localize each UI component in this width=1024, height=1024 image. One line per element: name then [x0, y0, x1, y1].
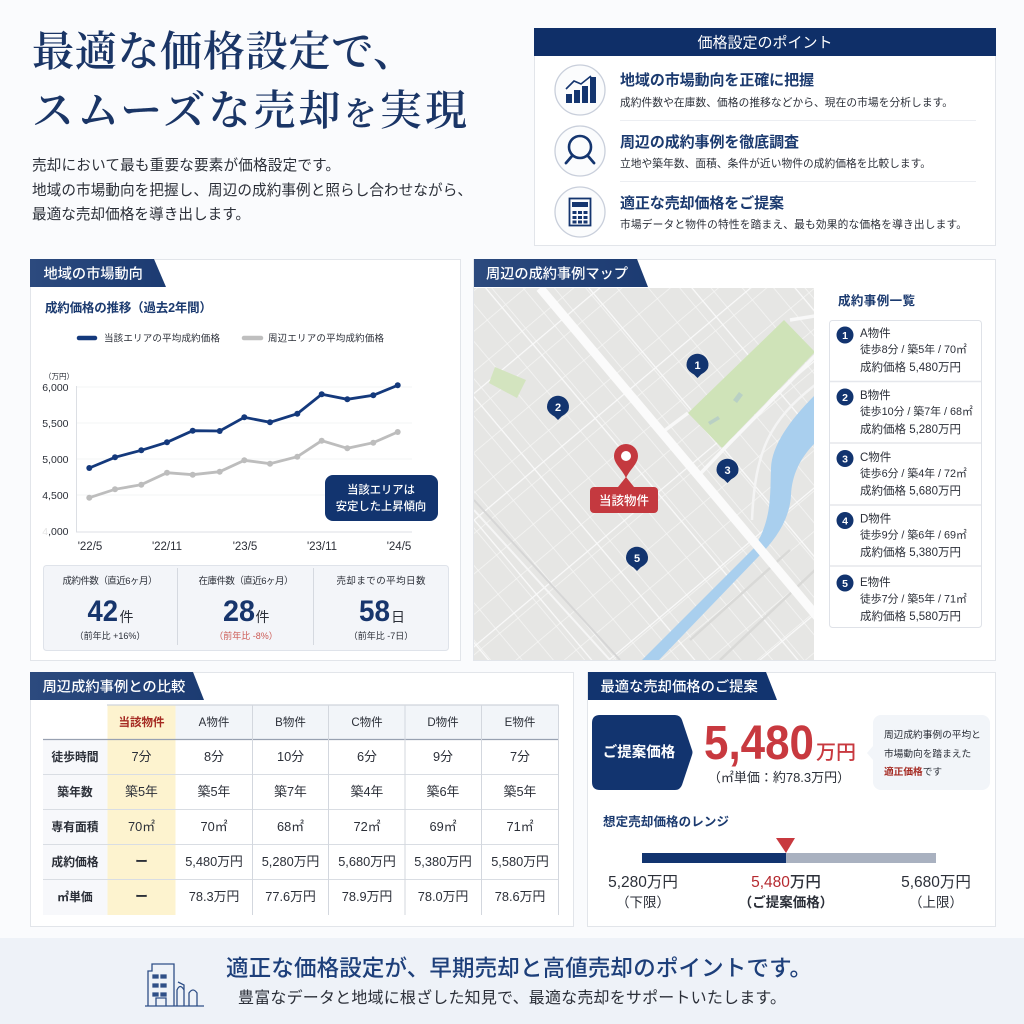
intro text: 地域の市場動向を把握し、周辺の成約事例と照らし合わせながら、 — [32, 182, 472, 199]
case B: B物件 — [860, 388, 891, 402]
panel: nearby cases map — [474, 259, 996, 660]
stat: closed deals — [62, 575, 158, 641]
row: floor area: 70㎡ — [200, 819, 228, 834]
row: building age: 築5年 — [198, 784, 231, 799]
case D — [836, 512, 967, 559]
row: walking time — [51, 749, 530, 764]
row: unit price: 78.9万円 — [342, 889, 392, 904]
series: target area — [86, 382, 401, 471]
pin: case 5 — [626, 547, 648, 571]
case C: 3 — [842, 454, 848, 466]
y axis labels: 5,500 — [42, 418, 69, 430]
title — [32, 29, 467, 135]
table header: B物件 — [275, 715, 306, 729]
point 2: nearby cases: 立地や築年数、面積、条件が近い物件の成約価格を比較します。 — [620, 157, 931, 170]
row: walking time: 8分 — [204, 749, 224, 764]
case C: 徒歩6分 / 築4年 / 72㎡ — [860, 466, 967, 480]
heading: proposal — [588, 672, 777, 700]
row: walking time: 10分 — [277, 749, 304, 764]
case B — [836, 388, 973, 436]
range bar — [642, 838, 936, 863]
stat: inventory: 件 — [256, 609, 270, 625]
y axis labels: 5,000 — [42, 454, 69, 466]
panel: market trends — [30, 259, 460, 660]
stat: days to sale: （前年比 -7日） — [349, 630, 413, 641]
chart legend: 周辺エリアの平均成約価格 — [268, 332, 384, 344]
note: appropriate price — [867, 715, 990, 790]
row: floor area — [51, 819, 534, 834]
y axis labels: 4,500 — [42, 490, 69, 502]
case B: 徒歩10分 / 築7年 / 68㎡ — [860, 404, 973, 418]
row: unit price — [57, 889, 545, 904]
intro text — [32, 157, 472, 223]
case D: 徒歩9分 / 築6年 / 69㎡ — [860, 528, 967, 542]
chart legend — [79, 332, 384, 344]
row: walking time: 7分 — [132, 749, 152, 764]
pin: case 1 — [686, 354, 708, 378]
line chart — [42, 372, 438, 553]
y axis labels: 6,000 — [42, 382, 69, 394]
case A: 成約価格 5,480万円 — [860, 360, 961, 374]
case E: 5 — [842, 578, 848, 590]
chart title: 成約価格の推移（過去2年間） — [45, 300, 212, 315]
stat: inventory: 在庫件数（直近6ヶ月） — [198, 575, 294, 587]
point 1: market trend — [555, 65, 953, 115]
proposed price value: 万円 — [816, 742, 856, 764]
row: closing price: 成約価格 — [51, 855, 99, 869]
map — [474, 288, 820, 660]
case E: 成約価格 5,580万円 — [860, 609, 961, 623]
pin: case 3 — [716, 459, 738, 483]
row: closing price: 5,480万円 — [185, 854, 243, 869]
range labels: （下限） — [616, 895, 670, 910]
note: appropriate price: 周辺成約事例の平均と — [884, 728, 981, 741]
icon: bar chart — [555, 65, 605, 115]
table header: C物件 — [351, 715, 383, 729]
case E: 徒歩7分 / 築5年 / 71㎡ — [860, 592, 967, 606]
row: closing price: 5,580万円 — [491, 854, 549, 869]
heading: map: 周辺の成約事例マップ — [486, 266, 628, 282]
pin: subject property — [590, 444, 658, 513]
main road — [540, 288, 820, 620]
footer subtext: 豊富なデータと地域に根ざした知見で、最適な売却をサポートいたします。 — [238, 988, 786, 1007]
row: walking time: 6分 — [357, 749, 377, 764]
point 3: proposal — [555, 187, 967, 237]
y axis labels: 4,000 — [42, 526, 69, 538]
table header: E物件 — [505, 715, 535, 729]
note: appropriate price: 適正価格です — [884, 765, 942, 778]
footer message: 適正な価格設定が、早期売却と高値売却のポイントです。 — [226, 956, 812, 981]
x axis labels — [78, 541, 411, 553]
stat: inventory: 28 — [223, 595, 255, 628]
icon: buildings — [145, 964, 204, 1006]
row: building age: 築年数 — [57, 785, 93, 799]
stat: closed deals: 件 — [120, 609, 134, 625]
case C: 成約価格 5,680万円 — [860, 484, 961, 498]
point 1: market trend: 成約件数や在庫数、価格の推移などから、現在の市場を分析します。 — [620, 96, 953, 109]
x axis labels: '23/5 — [233, 541, 257, 553]
park: small — [489, 367, 526, 398]
case A: 1 — [842, 330, 848, 342]
case D: D物件 — [860, 512, 891, 526]
x axis labels: '22/5 — [78, 541, 102, 553]
icon: calculator — [555, 187, 605, 237]
table header: 当該物件 — [118, 715, 165, 729]
range labels: 5,280万円 — [608, 874, 678, 891]
y axis labels: （万円） — [44, 372, 74, 381]
case D: 成約価格 5,380万円 — [860, 545, 961, 559]
row: building age: 築5年 — [125, 784, 158, 799]
stats box — [44, 566, 448, 650]
row: floor area: 72㎡ — [353, 819, 381, 834]
note: appropriate price: 市場動向を踏まえた — [884, 747, 971, 760]
title: 最適な価格設定で、 — [32, 29, 415, 76]
case A: A物件 — [860, 326, 891, 340]
case C: C物件 — [860, 450, 891, 464]
callout: upward trend — [325, 475, 438, 521]
intro text: 売却において最も重要な要素が価格設定です。 — [32, 157, 340, 174]
pin: case 2 — [547, 396, 569, 420]
row: closing price: ー — [135, 854, 148, 869]
table header: A物件 — [199, 715, 229, 729]
heading: market trends — [30, 259, 166, 287]
x axis labels: '22/11 — [152, 541, 182, 553]
y axis labels — [42, 372, 74, 538]
pin: case 3: 3 — [724, 465, 731, 477]
river — [642, 395, 815, 660]
point 1: market trend: 地域の市場動向を正確に把握 — [620, 71, 814, 89]
stat: inventory — [198, 575, 294, 641]
row: unit price: 78.3万円 — [189, 889, 239, 904]
row: building age: 築6年 — [427, 784, 460, 799]
range title: 想定売却価格のレンジ — [603, 814, 729, 829]
title: スムーズな売却を実現 — [32, 88, 467, 135]
proposed price value: （㎡単価：約78.3万円） — [708, 770, 850, 785]
row: floor area: 68㎡ — [277, 819, 304, 834]
point 3: proposal: 市場データと物件の特性を踏まえ、最も効果的な価格を導き出します。 — [620, 218, 967, 231]
row: closing price — [51, 854, 549, 869]
row: walking time: 9分 — [433, 749, 453, 764]
row: unit price: ー — [135, 889, 148, 904]
footer band — [0, 938, 1024, 1024]
range labels: 5,480万円 — [751, 874, 821, 891]
park: large — [688, 320, 815, 448]
heading: comparison — [30, 672, 204, 700]
stat: inventory: （前年比 -8%） — [214, 630, 278, 641]
range labels: 5,680万円 — [901, 874, 971, 891]
point 3: proposal: 適正な売却価格をご提案 — [620, 194, 784, 212]
panel: price setting points — [534, 28, 996, 246]
railway — [474, 500, 620, 660]
point 2: nearby cases: 周辺の成約事例を徹底調査 — [620, 133, 799, 151]
intro text: 最適な売却価格を導き出します。 — [32, 206, 250, 223]
pin: subject property: 当該物件 — [599, 493, 649, 508]
panel: price proposal — [588, 672, 996, 926]
panel header: 価格設定のポイント — [697, 34, 833, 52]
proposed price value: 5,480 — [704, 717, 814, 770]
row: floor area: 専有面積 — [51, 820, 99, 834]
row: closing price: 5,380万円 — [414, 854, 472, 869]
case B: 2 — [842, 392, 848, 404]
row: walking time: 徒歩時間 — [51, 750, 99, 764]
case C — [836, 450, 967, 498]
stat: days to sale: 売却までの平均日数 — [336, 575, 426, 587]
heading: proposal: 最適な売却価格のご提案 — [600, 678, 758, 696]
heading: map — [474, 259, 648, 287]
row: floor area: 70㎡ — [128, 819, 155, 834]
badge: proposed price — [592, 715, 692, 790]
range labels: （ご提案価格） — [739, 894, 833, 910]
comparison table — [43, 705, 558, 915]
row: unit price: 77.6万円 — [265, 889, 316, 904]
heading: market trends: 地域の市場動向 — [44, 266, 143, 282]
row: building age — [57, 784, 537, 799]
row: floor area: 71㎡ — [506, 819, 534, 834]
callout: upward trend: 当該エリアは — [347, 482, 415, 496]
stat: closed deals: 成約件数（直近6ヶ月） — [62, 575, 158, 587]
stat: days to sale — [336, 575, 426, 641]
table header — [118, 715, 535, 729]
icon: magnifier — [555, 126, 605, 176]
pin: case 1: 1 — [694, 360, 701, 372]
pin: case 2: 2 — [555, 402, 561, 414]
case E — [836, 574, 967, 623]
row: floor area: 69㎡ — [429, 819, 457, 834]
list title: 成約事例一覧 — [838, 293, 915, 308]
point 2: nearby cases — [555, 126, 931, 176]
range labels — [608, 874, 971, 910]
panel: comparison table — [30, 672, 574, 926]
row: building age: 築5年 — [504, 784, 537, 799]
series: surrounding area — [86, 429, 401, 501]
proposed price value — [704, 717, 856, 785]
heading: comparison: 周辺成約事例との比較 — [42, 678, 185, 696]
row: unit price: 78.0万円 — [418, 889, 468, 904]
stat: closed deals: 42 — [88, 595, 118, 628]
x axis labels: '23/11 — [307, 541, 337, 553]
badge: proposed price: ご提案価格 — [603, 743, 676, 761]
row: unit price: ㎡単価 — [57, 890, 93, 904]
row: unit price: 78.6万円 — [495, 889, 545, 904]
row: walking time: 7分 — [510, 749, 530, 764]
stat: closed deals: （前年比 +16%） — [75, 630, 145, 641]
case A: 徒歩8分 / 築5年 / 70㎡ — [860, 342, 967, 356]
range labels: （上限） — [909, 895, 963, 910]
stat: days to sale: 58 — [359, 595, 390, 628]
table header: D物件 — [427, 715, 459, 729]
row: closing price: 5,280万円 — [262, 854, 319, 869]
panel header — [534, 28, 996, 56]
roads around park — [664, 316, 815, 474]
stat: days to sale: 日 — [391, 609, 405, 625]
case B: 成約価格 5,280万円 — [860, 422, 961, 436]
case D: 4 — [842, 516, 848, 528]
case E: E物件 — [860, 575, 891, 589]
callout: upward trend: 安定した上昇傾向 — [336, 499, 426, 513]
x axis labels: '24/5 — [387, 541, 411, 553]
row: building age: 築7年 — [274, 784, 307, 799]
row: building age: 築4年 — [351, 784, 384, 799]
pin: case 5: 5 — [634, 553, 640, 565]
case list — [830, 320, 982, 628]
chart legend: 当該エリアの平均成約価格 — [104, 332, 220, 344]
row: closing price: 5,680万円 — [338, 854, 396, 869]
case A — [836, 326, 967, 374]
